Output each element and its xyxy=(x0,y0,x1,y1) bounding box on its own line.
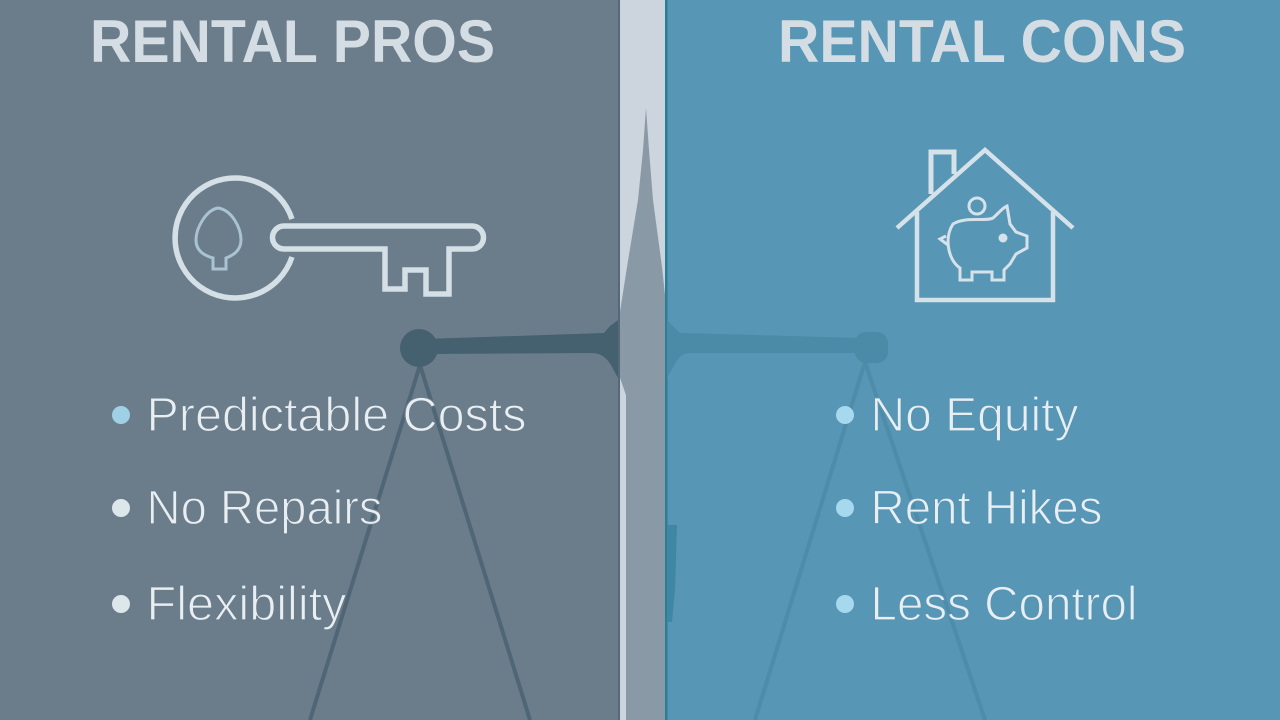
bullet: predictable costs xyxy=(112,406,130,424)
piggy bank xyxy=(948,206,1027,280)
panel: rental cons background xyxy=(666,0,1280,720)
heading: rental pros: RENTAL PROS xyxy=(90,8,495,75)
icon: key xyxy=(175,178,484,298)
item: less control: Less Control xyxy=(870,578,1138,631)
bullet: no repairs xyxy=(112,499,130,517)
scale: right beam and legs xyxy=(667,320,985,720)
item: no equity: No Equity xyxy=(870,389,1078,442)
icon: house with piggy bank xyxy=(897,150,1073,300)
item: flexibility: Flexibility xyxy=(146,578,346,631)
item: rent hikes: Rent Hikes xyxy=(870,482,1102,535)
bullet: no equity xyxy=(836,406,854,424)
heading: rental cons: RENTAL CONS xyxy=(778,8,1186,75)
bullet: less control xyxy=(836,595,854,613)
list: rental cons xyxy=(836,389,1138,631)
centre divider column xyxy=(618,0,677,720)
item: predictable costs: Predictable Costs xyxy=(146,389,526,442)
bullet: rent hikes xyxy=(836,499,854,517)
item: no repairs: No Repairs xyxy=(146,482,382,535)
scale: left beam and legs xyxy=(310,320,618,720)
bullet: flexibility xyxy=(112,595,130,613)
list: rental pros xyxy=(112,389,526,631)
icon: keyhole xyxy=(196,208,241,269)
panel: rental pros background xyxy=(0,0,618,720)
